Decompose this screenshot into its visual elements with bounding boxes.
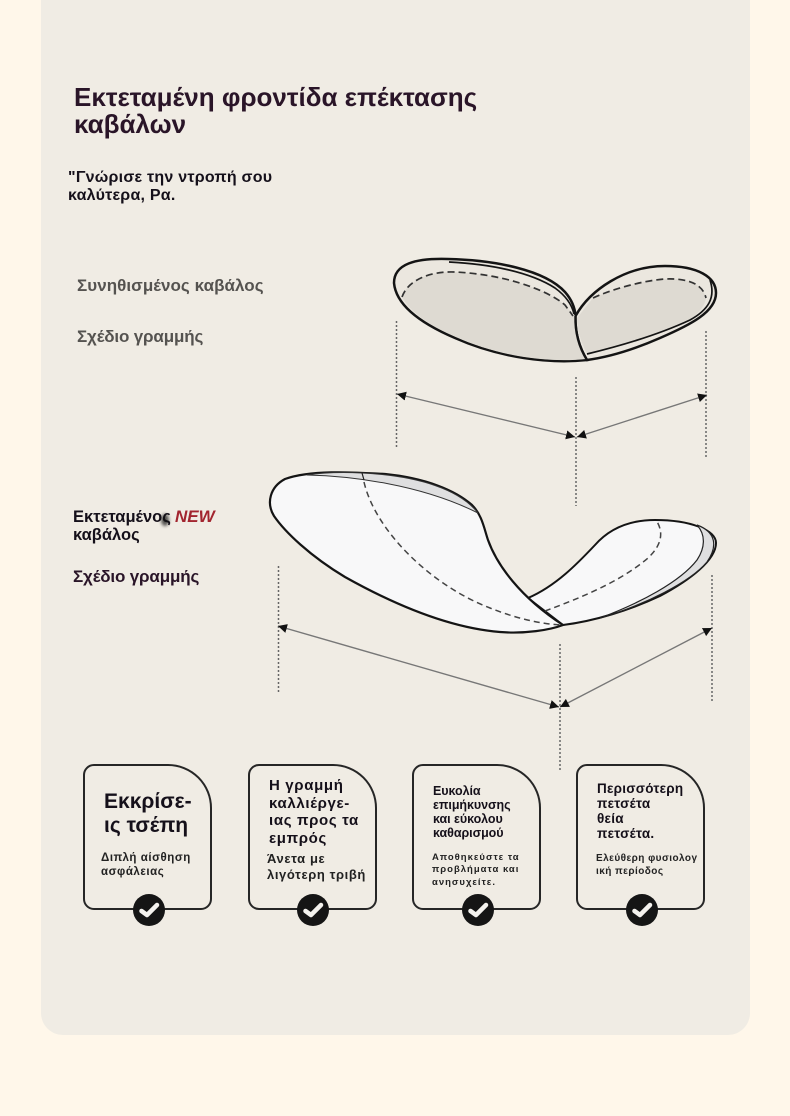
card 1 heading: Εκκρίσε-	[104, 790, 192, 813]
regular pad left width arrow	[397, 394, 575, 437]
card 1 text	[101, 852, 191, 878]
inner shading of regular pad	[402, 272, 706, 360]
card 3 heading: επιμήκυνσης	[433, 798, 511, 812]
extended pad left width arrow	[278, 626, 559, 707]
card 2 heading: Η γραμμή	[269, 777, 344, 794]
card 4 heading: θεία	[597, 811, 624, 826]
icon: check 1	[133, 894, 165, 926]
icon: check 3	[462, 894, 494, 926]
card 3 text: ανησυχείτε.	[432, 877, 496, 888]
label: extended crotch	[73, 507, 216, 544]
subtitle	[68, 169, 272, 204]
left lobe of regular pad	[394, 259, 587, 361]
regular pad guide lines	[396, 321, 706, 506]
card 3 heading: καθαρισμού	[433, 826, 504, 840]
card 1 text: ασφάλειας	[101, 866, 164, 878]
card 4 text	[596, 853, 697, 876]
card 2 text: Άνετα με	[267, 851, 325, 866]
card 2 text	[267, 851, 366, 882]
card 2 text: λιγότερη τριβή	[267, 866, 366, 882]
title: καβάλων	[74, 109, 186, 139]
label: extended crotch: NEW	[175, 507, 215, 526]
title	[74, 82, 477, 139]
card 1 heading	[104, 790, 192, 836]
card 4 heading	[597, 781, 683, 841]
card 4	[576, 764, 705, 910]
subtitle: καλύτερα, Ρα.	[68, 187, 176, 204]
subtitle: "Γνώρισε την ντροπή σου	[68, 169, 272, 186]
card 2 heading: ιας προς τα	[269, 812, 359, 829]
card 1	[83, 764, 212, 910]
card 1 text: Διπλή αίσθηση	[101, 852, 191, 864]
label: regular line design: Σχέδιο γραμμής	[77, 327, 203, 346]
extended pad guide lines	[278, 566, 712, 772]
card 2 heading	[269, 777, 359, 846]
card 3	[412, 764, 541, 910]
right wing of extended pad	[528, 520, 716, 625]
label: regular crotch: Συνηθισμένος καβάλος	[77, 276, 264, 295]
diagram: extended crotch	[270, 472, 716, 772]
card 2 heading: εμπρός	[269, 830, 327, 846]
card 2	[248, 764, 377, 910]
grey edge of left body	[307, 473, 478, 513]
icon: check 2	[297, 894, 329, 926]
card 3 heading: και εύκολου	[433, 812, 503, 826]
title: Εκτεταμένη φροντίδα επέκτασης	[74, 82, 477, 112]
card 4 heading: Περισσότερη	[597, 781, 683, 796]
card 4 heading: πετσέτα.	[597, 826, 654, 841]
card 3 text: Αποθηκεύστε τα	[432, 852, 520, 863]
card 1 heading: ις τσέπη	[104, 814, 188, 836]
card 4 text: ική περίοδος	[596, 866, 664, 876]
extended pad right width arrow	[560, 628, 712, 707]
card 2 heading: καλλιέργε-	[269, 794, 350, 812]
label: extended crotch: Εκτεταμένος	[73, 508, 171, 526]
card 3 heading: Ευκολία	[433, 784, 481, 798]
card 3 text	[432, 852, 520, 888]
extended pad dashed seam	[364, 482, 661, 625]
right lobe of regular pad	[575, 266, 716, 360]
card 4 text: Ελεύθερη φυσιολογ	[596, 853, 697, 864]
regular pad right width arrow	[577, 395, 707, 437]
label: extended crotch: καβάλος	[73, 526, 140, 544]
icon: check 4	[626, 894, 658, 926]
regular pad seams	[449, 262, 712, 354]
grey edge of right wing	[600, 525, 714, 618]
card 4 heading: πετσέτα	[597, 796, 650, 811]
card 3 heading	[433, 784, 511, 840]
label: extended line design: Σχέδιο γραμμής	[73, 567, 199, 586]
left body of extended pad	[270, 472, 563, 633]
card 3 text: προβλήματα και	[432, 864, 519, 875]
